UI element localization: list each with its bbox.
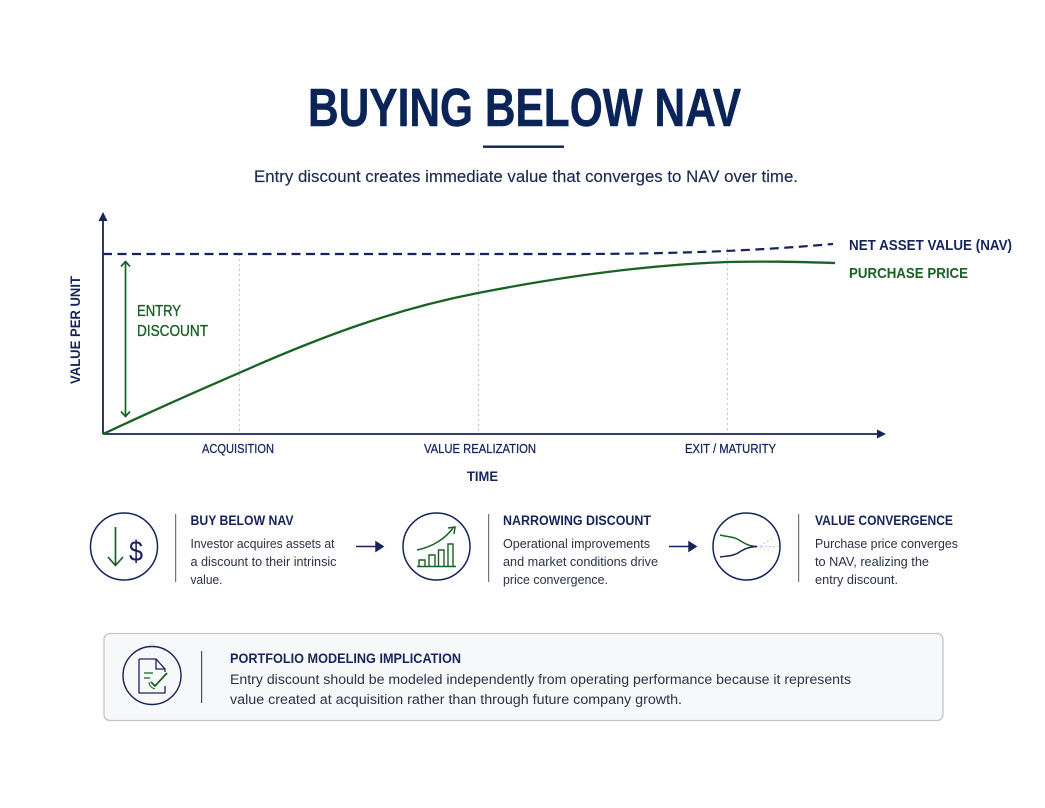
- purchase price curve: [103, 262, 835, 434]
- x axis milestone labels: ACQUISITION: [202, 441, 274, 456]
- description: [815, 537, 958, 587]
- panel: portfolio modeling implication: [104, 634, 943, 720]
- purchase price label: PURCHASE PRICE: [849, 265, 968, 282]
- description: Purchase price converges: [815, 537, 958, 551]
- step 2: narrowing discount: [403, 513, 658, 587]
- entry discount label: DISCOUNT: [137, 323, 208, 340]
- description: and market conditions drive: [503, 555, 658, 569]
- icon: growth bars: [403, 513, 470, 580]
- description: value.: [190, 573, 222, 587]
- icon: converging lines: [713, 513, 780, 580]
- y axis label: VALUE PER UNIT: [67, 276, 83, 384]
- step 1: buy below NAV: [90, 513, 336, 587]
- heading: BUY BELOW NAV: [190, 513, 294, 528]
- x axis milestone labels: [202, 441, 776, 456]
- NAV line label: NET ASSET VALUE (NAV): [849, 237, 1012, 254]
- description: Operational improvements: [503, 537, 650, 551]
- x axis milestone labels: EXIT / MATURITY: [685, 441, 776, 456]
- description: entry discount.: [815, 573, 898, 587]
- description: a discount to their intrinsic: [190, 555, 336, 569]
- heading: PORTFOLIO MODELING IMPLICATION: [230, 650, 461, 666]
- icon: document with check: [123, 646, 181, 704]
- arrow: step 2 to step 3: [669, 542, 696, 551]
- line chart: value per unit over time: [67, 212, 1012, 484]
- heading: NARROWING DISCOUNT: [503, 513, 652, 528]
- NAV dashed line: [103, 244, 833, 254]
- description: Investor acquires assets at: [190, 537, 335, 551]
- heading: VALUE CONVERGENCE: [815, 513, 953, 528]
- description: to NAV, realizing the: [815, 555, 929, 569]
- vertical milestone guide lines: [240, 248, 728, 434]
- entry discount label: ENTRY: [137, 303, 181, 320]
- body text: [230, 672, 851, 707]
- entry discount arrow: [121, 262, 130, 416]
- x axis label: TIME: [467, 468, 498, 484]
- entry discount label: [137, 303, 208, 340]
- arrow: step 1 to step 2: [356, 542, 383, 551]
- step 3: value convergence: [713, 513, 958, 587]
- body text: Entry discount should be modeled independently from operating performance because it represents: [230, 672, 851, 687]
- title: BUYING BELOW NAV: [308, 78, 741, 138]
- x axis milestone labels: VALUE REALIZATION: [424, 441, 536, 456]
- description: [503, 537, 658, 587]
- subtitle: Entry discount creates immediate value that converges to NAV over time.: [254, 168, 798, 186]
- description: [190, 537, 336, 587]
- icon: down arrow and dollar: [90, 513, 158, 580]
- body text: value created at acquisition rather than through future company growth.: [230, 692, 682, 707]
- icon: down arrow and dollar: $: [129, 536, 143, 568]
- axes: [98, 212, 886, 438]
- description: price convergence.: [503, 573, 608, 587]
